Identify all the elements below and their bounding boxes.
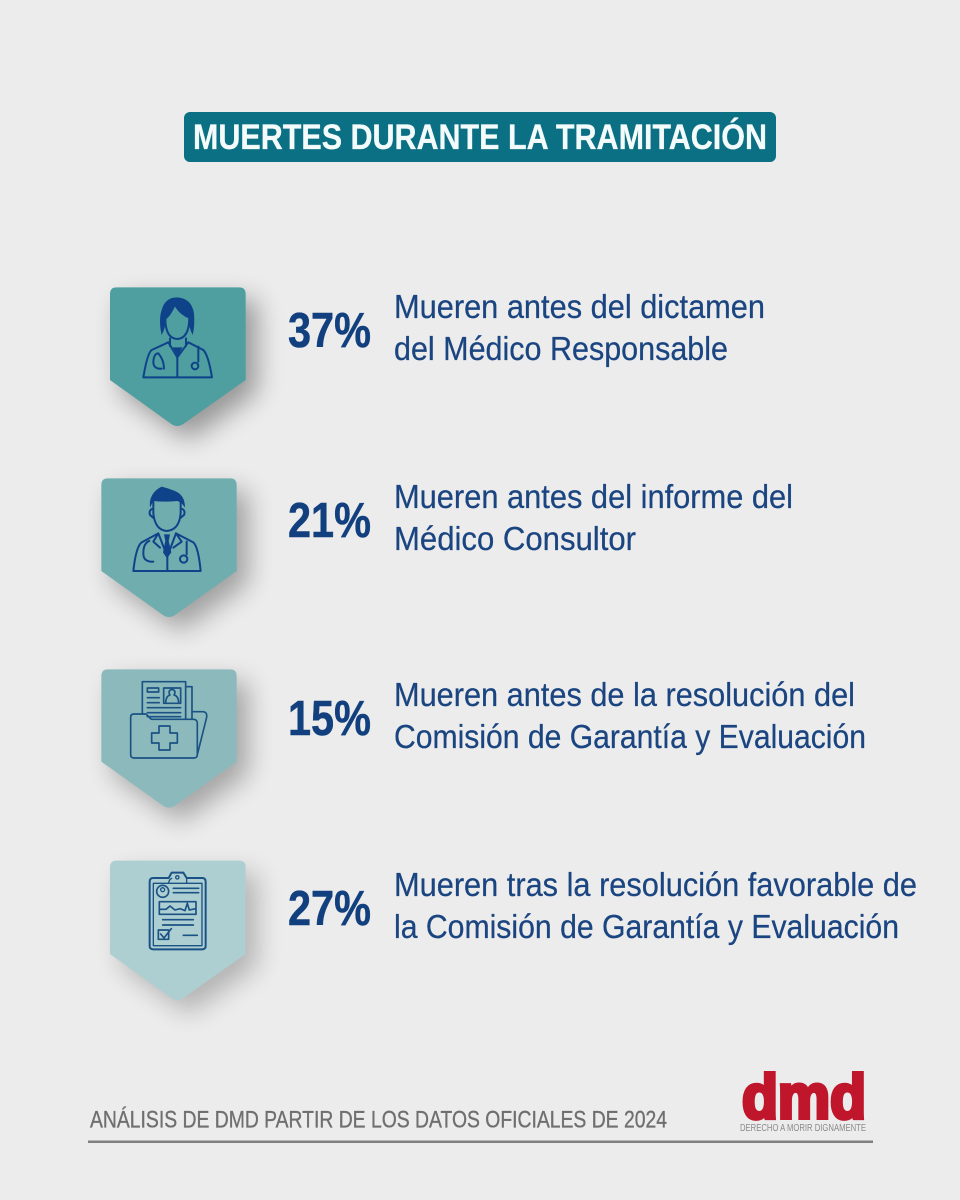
percentage 27%: 27% xyxy=(288,882,371,936)
text: row 37% xyxy=(394,288,765,367)
percentage 37%: 37% xyxy=(288,304,371,358)
text: row 37%: del Médico Responsable xyxy=(394,330,728,367)
text: row 27% xyxy=(394,866,917,945)
percentage 21%: 21% xyxy=(288,494,371,548)
text: row 15% xyxy=(394,676,866,755)
text: row 21% xyxy=(394,478,793,557)
title: MUERTES DURANTE LA TRAMITACIÓN xyxy=(193,117,767,157)
text: row 21%: Mueren antes del informe del xyxy=(394,478,793,515)
panel: row 15% xyxy=(101,669,866,820)
logo: dmd: DERECHO A MORIR DIGNAMENTE xyxy=(740,1122,866,1134)
percentage 15%: 15% xyxy=(288,692,371,746)
footer source note: ANÁLISIS DE DMD PARTIR DE LOS DATOS OFICIALES DE 2024 xyxy=(90,1106,667,1134)
text: row 27%: la Comisión de Garantía y Evaluación xyxy=(394,908,899,945)
text: row 21%: Médico Consultor xyxy=(394,520,636,557)
icon: male doctor on teal shield xyxy=(101,478,248,629)
text: row 27%: Mueren tras la resolución favorable de xyxy=(394,866,917,903)
panel: row 37% xyxy=(110,287,765,438)
text: row 15%: Comisión de Garantía y Evaluación xyxy=(394,718,866,755)
icon: clipboard on teal shield xyxy=(110,861,257,1012)
text: row 15%: Mueren antes de la resolución del xyxy=(394,676,855,713)
panel: row 27% xyxy=(110,861,917,1012)
title xyxy=(184,112,776,162)
text: row 37%: Mueren antes del dictamen xyxy=(394,288,765,325)
panel: row 21% xyxy=(101,478,793,629)
icon: female doctor on teal shield xyxy=(110,287,257,438)
logo: dmd: dmd xyxy=(742,1063,866,1132)
icon: medical folder on teal shield xyxy=(101,669,248,820)
